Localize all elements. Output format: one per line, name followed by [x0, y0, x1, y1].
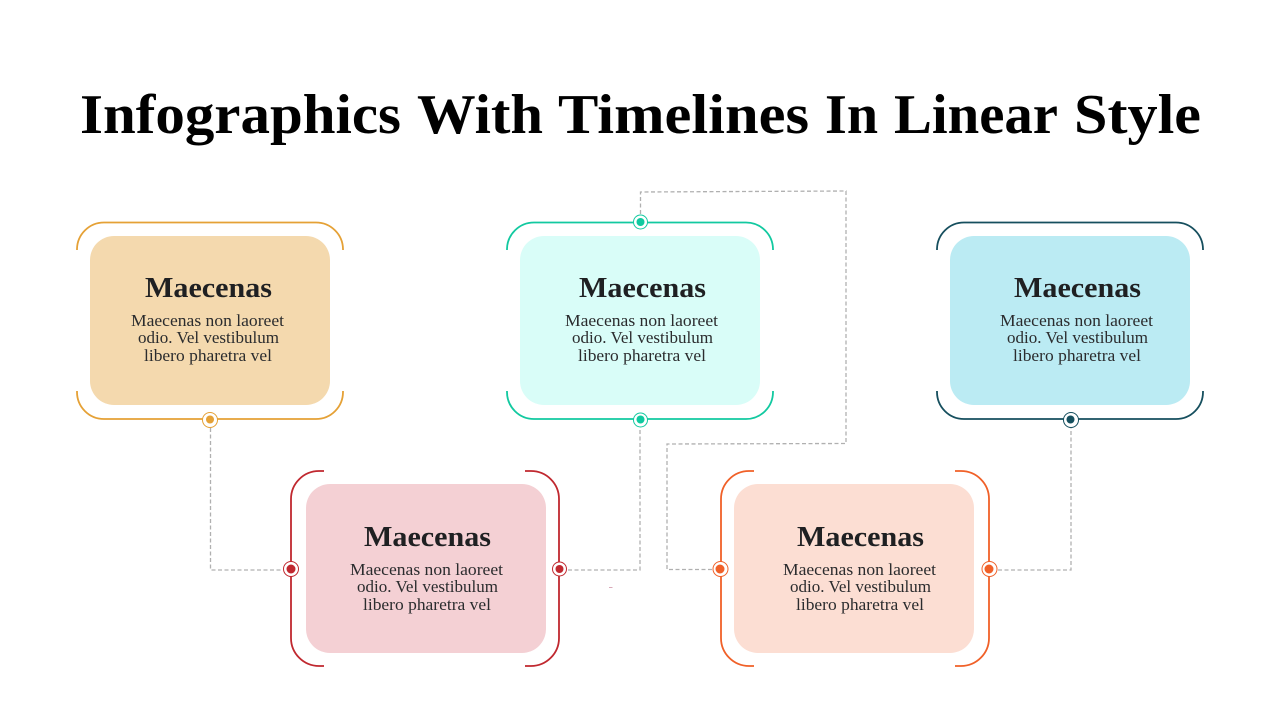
heading: Maecenas	[1014, 272, 1141, 304]
card background	[950, 236, 1190, 405]
node left	[284, 562, 298, 576]
node right	[552, 562, 566, 576]
title: Infographics	[80, 84, 401, 146]
connector: card 4 to card 2	[568, 428, 640, 570]
body text: odio. Vel vestibulum	[138, 328, 279, 347]
title	[80, 84, 1201, 146]
body text: Maecenas non laoreet	[131, 311, 284, 330]
body text: libero pharetra vel	[144, 346, 272, 365]
bracket	[721, 471, 989, 666]
body text: odio. Vel vestibulum	[790, 577, 931, 596]
panel: card 1 orange	[77, 222, 343, 428]
body text: odio. Vel vestibulum	[357, 577, 498, 596]
connector: card 2 top to card 5	[640, 191, 846, 570]
body text: libero pharetra vel	[578, 346, 706, 365]
card background	[90, 236, 330, 405]
node left	[713, 562, 728, 576]
bracket	[507, 222, 773, 419]
card background	[734, 484, 974, 653]
body text	[783, 560, 936, 614]
bracket	[291, 471, 559, 666]
card background	[520, 236, 760, 405]
panel: card 5 coral	[713, 471, 997, 666]
small dash mark	[609, 586, 612, 588]
node right	[982, 562, 997, 576]
bracket	[937, 222, 1203, 419]
connector: card 1 to card 4	[210, 428, 283, 570]
title: Linear	[894, 84, 1058, 146]
body text: odio. Vel vestibulum	[572, 328, 713, 347]
body text	[565, 311, 718, 365]
body text: Maecenas non laoreet	[565, 311, 718, 330]
panel: card 3 blue	[937, 222, 1203, 428]
body text	[131, 311, 284, 365]
body text: Maecenas non laoreet	[350, 560, 503, 579]
panel: card 4 red	[284, 471, 566, 666]
body text: libero pharetra vel	[796, 595, 924, 614]
panel: card 2 teal	[507, 215, 773, 427]
body text: libero pharetra vel	[1013, 346, 1141, 365]
body text	[350, 560, 503, 614]
card background	[306, 484, 546, 653]
title: Style	[1074, 84, 1201, 146]
heading: Maecenas	[797, 521, 924, 553]
body text: Maecenas non laoreet	[1000, 311, 1153, 330]
node	[1064, 412, 1078, 428]
body text	[1000, 311, 1153, 365]
title: In	[825, 84, 878, 146]
connector: card 5 to card 3	[998, 428, 1071, 570]
heading: Maecenas	[145, 272, 272, 304]
node	[202, 412, 218, 428]
bracket	[77, 222, 343, 419]
body text: Maecenas non laoreet	[783, 560, 936, 579]
title: Timelines	[558, 84, 809, 146]
heading: Maecenas	[364, 521, 491, 553]
title: With	[417, 84, 543, 146]
body text: odio. Vel vestibulum	[1007, 328, 1148, 347]
body text: libero pharetra vel	[363, 595, 491, 614]
node top	[634, 215, 648, 229]
node bottom	[634, 413, 648, 427]
heading: Maecenas	[579, 272, 706, 304]
